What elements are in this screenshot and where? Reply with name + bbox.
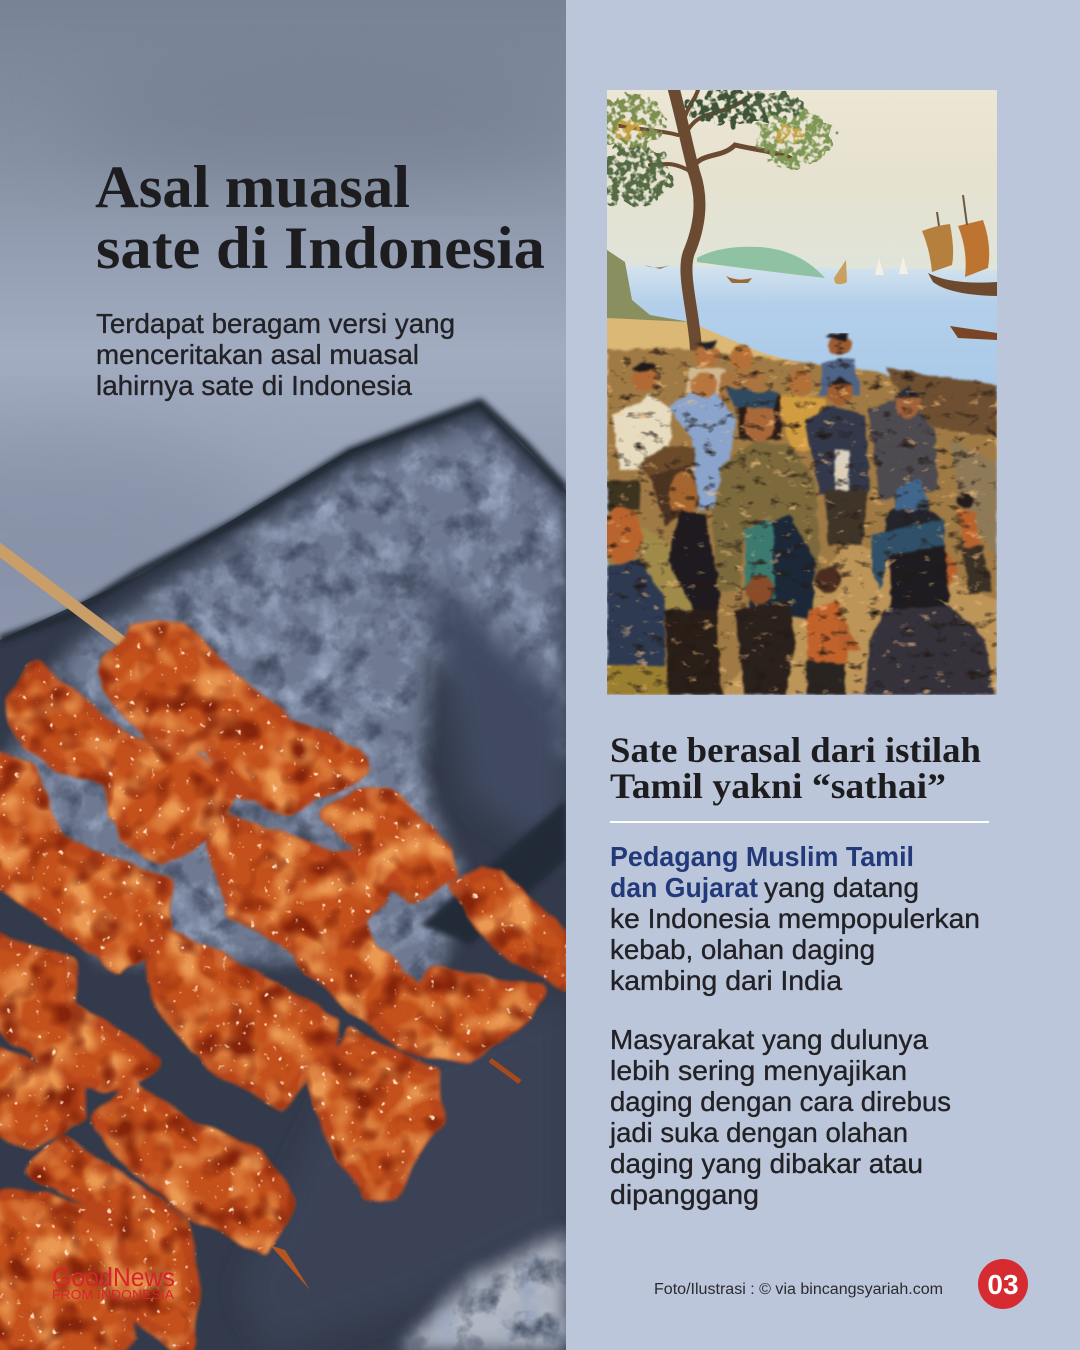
title xyxy=(95,154,545,281)
logo: GoodNews from Indonesia: GoodNews xyxy=(52,1262,175,1292)
ground xyxy=(607,348,997,695)
paragraph: Tamil and Gujarat traders: kebab, olahan daging xyxy=(610,934,875,965)
painting: traders arriving on the shore xyxy=(594,88,997,695)
paragraph: grilled meat habit: daging dengan cara direbus xyxy=(610,1086,951,1117)
hat man and left figure xyxy=(602,446,722,695)
boat on shore xyxy=(885,368,997,436)
title: Asal muasal xyxy=(95,154,410,220)
section heading: Sate berasal dari istilah xyxy=(610,730,981,770)
blurred background xyxy=(0,0,590,1350)
section heading xyxy=(610,730,981,806)
panel: right column xyxy=(607,90,1028,1309)
paragraph: Tamil and Gujarat traders: dan Gujarat xyxy=(610,872,758,903)
foliage xyxy=(594,88,833,205)
paragraph: grilled meat habit: Masyarakat yang dulunya xyxy=(610,1024,928,1055)
sea xyxy=(626,265,997,393)
central man xyxy=(712,388,822,590)
island xyxy=(697,247,825,278)
paragraph: Tamil and Gujarat traders: yang datang xyxy=(764,872,919,903)
photo credit: Foto/Ilustrasi : © via bincangsyariah.com xyxy=(654,1281,943,1298)
paragraph: Tamil and Gujarat traders xyxy=(610,841,980,996)
tree trunk and branches xyxy=(615,90,790,350)
paragraph: Tamil and Gujarat traders: ke Indonesia mempopulerkan xyxy=(610,903,980,934)
section heading: Tamil yakni “sathai” xyxy=(610,766,946,806)
subtitle xyxy=(96,308,455,401)
paragraph: Tamil and Gujarat traders: Pedagang Muslim Tamil xyxy=(610,841,914,872)
child in teal xyxy=(735,515,815,695)
charcoal grill xyxy=(0,403,566,1350)
paragraph: grilled meat habit: dipanggang xyxy=(610,1179,759,1210)
boy xyxy=(806,567,860,695)
satay skewers xyxy=(0,626,566,1350)
panel background xyxy=(566,0,1080,1350)
background people xyxy=(612,333,992,595)
subtitle: lahirnya sate di Indonesia xyxy=(96,370,412,401)
bamboo skewer xyxy=(0,547,520,1290)
paragraph: Tamil and Gujarat traders: kambing dari India xyxy=(610,965,842,996)
paragraph: grilled meat habit: jadi suka dengan olahan xyxy=(609,1117,908,1148)
beach xyxy=(607,318,997,460)
paragraph: grilled meat habit: daging yang dibakar atau xyxy=(610,1148,923,1179)
left shore xyxy=(607,250,690,325)
paragraph: grilled meat habit xyxy=(609,1024,951,1210)
logo: GoodNews from Indonesia: FROM INDONESIA xyxy=(52,1288,175,1302)
subtitle: Terdapat beragam versi yang xyxy=(96,308,455,339)
dark robed figure xyxy=(865,478,995,695)
subtitle: menceritakan asal muasal xyxy=(96,339,419,370)
page number badge: 03 xyxy=(987,1269,1019,1300)
title: sate di Indonesia xyxy=(96,215,545,281)
paragraph: grilled meat habit: lebih sering menyajikan xyxy=(610,1055,907,1086)
panel: satay photo with title xyxy=(0,0,566,1350)
ships and boats xyxy=(644,195,997,340)
page number badge xyxy=(978,1259,1028,1309)
